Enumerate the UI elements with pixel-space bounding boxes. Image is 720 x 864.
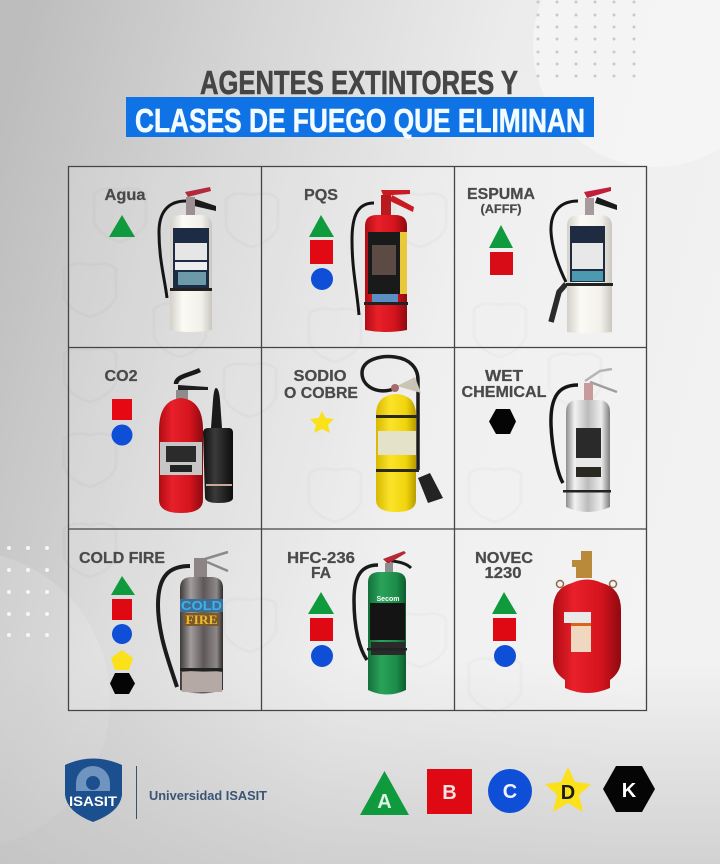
label: SODIO: SODIO	[294, 368, 346, 385]
extinguisher: cold fire: COLD	[181, 598, 222, 613]
legend: fire classes	[360, 766, 655, 815]
extinguisher: Novec tank	[553, 551, 621, 693]
class D symbol	[310, 411, 334, 433]
label: ESPUMA: ESPUMA	[467, 186, 535, 203]
class A	[360, 771, 409, 815]
label: WET: WET	[485, 368, 523, 385]
class D: D	[561, 782, 575, 804]
class symbols	[492, 592, 517, 667]
logo: Universidad ISASIT	[65, 758, 267, 822]
extinguisher: wet chemical	[551, 369, 617, 512]
label: AFFF: (AFFF)	[480, 202, 522, 216]
label: COLD FIRE: COLD FIRE	[79, 550, 165, 567]
extinguisher: dry chemical	[352, 190, 414, 332]
panel: Sodio o cobre	[284, 357, 443, 512]
icon: shield	[65, 758, 122, 822]
FIRE mark	[184, 613, 219, 626]
title line 2: CLASES DE FUEGO QUE ELIMINAN	[135, 102, 585, 139]
class symbols	[308, 592, 334, 667]
panel: Novec 1230	[475, 550, 621, 693]
panel: Espuma	[467, 186, 617, 334]
class symbols	[309, 215, 334, 290]
panel: Agua	[104, 187, 216, 332]
extinguisher: cold fire	[158, 552, 228, 694]
title highlight box	[126, 97, 594, 137]
dot pattern: left	[7, 546, 49, 637]
class D	[545, 767, 591, 812]
class A symbol	[109, 215, 135, 237]
extinguisher: carbon dioxide	[159, 370, 233, 513]
extinguisher: foam	[551, 187, 617, 334]
extinguisher: water	[159, 187, 216, 332]
label: NOVEC: NOVEC	[475, 550, 533, 567]
class K symbol	[489, 409, 516, 434]
panel: Cold Fire	[79, 550, 228, 694]
panel: Wet chemical	[462, 368, 617, 512]
title	[126, 64, 594, 139]
class symbols	[112, 399, 132, 446]
label: HFC-236: HFC-236	[287, 550, 355, 567]
shield wordmark: ISASIT	[69, 794, 118, 809]
title line 1: AGENTES EXTINTORES Y	[200, 64, 518, 101]
class K	[603, 766, 655, 812]
label: CO2: CO2	[104, 368, 138, 385]
class C: C	[503, 781, 517, 803]
label: 1230: 1230	[484, 565, 522, 582]
COLD mark	[180, 599, 223, 612]
class symbols	[489, 225, 513, 275]
label: FA: FA	[311, 565, 331, 582]
class B: B	[442, 782, 457, 804]
panel: CO2	[104, 368, 233, 513]
Secom brand: Secom	[377, 596, 399, 603]
class symbols	[110, 576, 135, 694]
extinguisher: cold fire: FIRE	[186, 612, 218, 627]
extinguisher: dry powder	[362, 357, 443, 512]
label: Agua: Agua	[104, 187, 146, 204]
extinguisher: HFC	[354, 551, 411, 694]
dot pattern: top right	[536, 0, 636, 78]
label: PQS: PQS	[304, 187, 338, 204]
class K: K	[622, 780, 637, 802]
class C	[488, 769, 532, 813]
label: O COBRE: O COBRE	[284, 385, 358, 402]
panel: PQS	[304, 187, 414, 332]
class B	[427, 769, 472, 814]
label: CHEMICAL: CHEMICAL	[462, 384, 547, 401]
comparison grid	[64, 166, 646, 712]
panel: HFC-236 FA	[287, 550, 411, 694]
logo name: Universidad ISASIT	[149, 788, 267, 803]
class A: A	[377, 791, 392, 813]
